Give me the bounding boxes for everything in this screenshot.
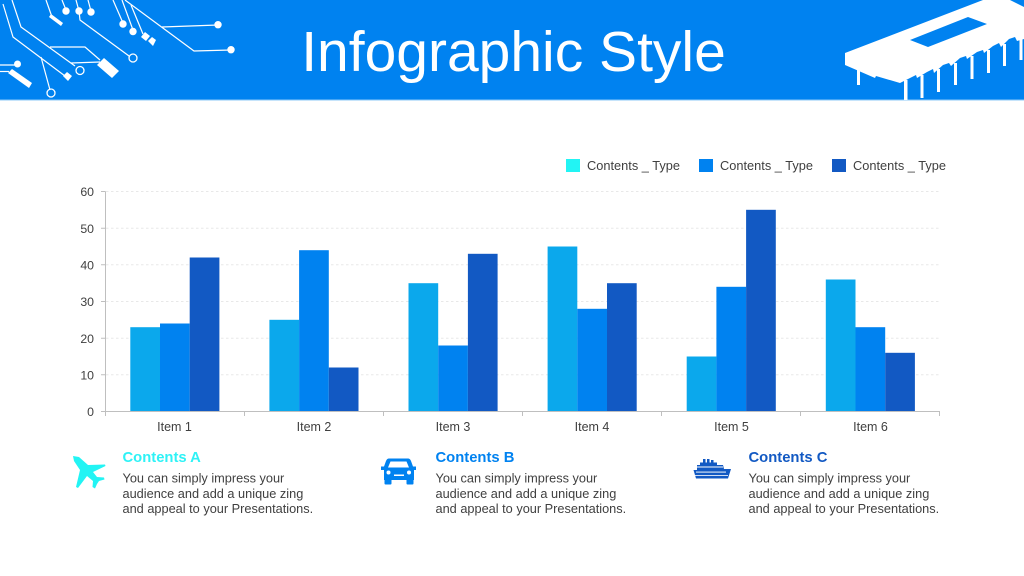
icon: car <box>381 458 416 484</box>
x axis labels: Item 5 <box>714 420 749 434</box>
text C: You can simply impress your <box>748 470 911 486</box>
y axis labels: 10 <box>80 368 94 382</box>
x axis labels <box>157 420 888 434</box>
panel: contents B <box>381 450 626 516</box>
y axis labels: 20 <box>80 332 94 346</box>
bars: item 3 <box>408 254 498 412</box>
y axis labels <box>80 185 94 419</box>
legend item 2: Contents _ Type <box>720 158 813 173</box>
legend item 3: Contents _ Type <box>853 158 946 173</box>
heading A: Contents A <box>122 450 201 466</box>
icon: airplane <box>73 456 106 488</box>
x axis labels: Item 1 <box>157 420 192 434</box>
y axis labels: 40 <box>80 258 94 272</box>
icon: circuit board traces <box>0 0 235 97</box>
icon: microchip <box>845 0 1024 100</box>
bar chart <box>80 185 940 434</box>
bars: item 1 <box>130 258 219 412</box>
heading B: Contents B <box>436 450 515 466</box>
x axis labels: Item 2 <box>297 420 331 434</box>
text C: and appeal to your Presentations. <box>748 501 939 516</box>
y axis labels: 60 <box>80 185 94 199</box>
text B: You can simply impress your <box>436 470 598 486</box>
panel: contents A <box>73 450 313 516</box>
bars: item 6 <box>826 280 915 412</box>
text B: audience and add a unique zing <box>436 486 616 501</box>
legend <box>566 158 946 173</box>
icon: ship <box>694 459 731 478</box>
text A: and appeal to your Presentations. <box>122 501 313 516</box>
text C: audience and add a unique zing <box>748 486 929 501</box>
title: Infographic Style <box>301 20 726 84</box>
x axis labels: Item 6 <box>853 420 888 434</box>
x axis labels: Item 3 <box>436 420 470 434</box>
header banner <box>0 0 1024 100</box>
panel: contents C <box>694 450 939 516</box>
y axis labels: 30 <box>80 295 94 309</box>
bars: item 4 <box>548 246 637 412</box>
text A: You can simply impress your <box>122 470 285 486</box>
heading C: Contents C <box>748 450 828 466</box>
text B: and appeal to your Presentations. <box>436 501 626 516</box>
text A: audience and add a unique zing <box>122 486 303 501</box>
legend item 1: Contents _ Type <box>587 158 680 173</box>
y axis labels: 50 <box>80 222 94 236</box>
bars: item 5 <box>687 210 776 412</box>
bars: item 2 <box>269 250 358 412</box>
x axis labels: Item 4 <box>575 420 609 434</box>
y axis labels: 0 <box>87 405 94 419</box>
